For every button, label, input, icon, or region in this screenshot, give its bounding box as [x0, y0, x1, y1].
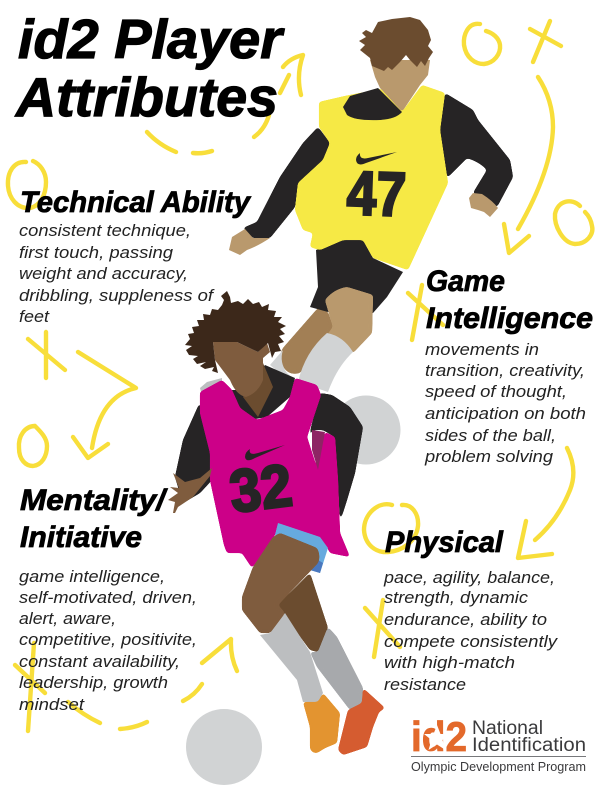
- face and neck: [370, 60, 430, 112]
- bib fold: [312, 430, 325, 470]
- player 47 in yellow bib: [229, 17, 513, 392]
- heading: [426, 265, 593, 335]
- title: id2 Player: [18, 8, 285, 70]
- hair: [359, 17, 433, 71]
- heading: Technical Ability: [20, 186, 251, 219]
- shorts: [275, 523, 328, 573]
- swoosh: [245, 445, 285, 460]
- title: Attributes: [14, 66, 278, 128]
- hair: [185, 291, 286, 373]
- description: self-motivated, driven,: [19, 588, 197, 607]
- title: [14, 8, 285, 128]
- logo mark: id2: [411, 713, 467, 760]
- front thigh: [325, 287, 373, 353]
- panel: mentality: [19, 484, 197, 714]
- collar: [343, 88, 402, 120]
- description: leadership, growth: [19, 673, 168, 692]
- circle: top right: [464, 24, 500, 64]
- description: anticipation on both: [425, 404, 586, 423]
- description: with high-match: [384, 653, 515, 672]
- logo: id2 national identification: [411, 713, 586, 774]
- sock back: [310, 627, 363, 710]
- heading: Intelligence: [426, 302, 593, 335]
- back leg: [278, 573, 328, 652]
- cross: game intelligence: [408, 285, 443, 340]
- panel: physical: [383, 526, 559, 694]
- player 32 in pink bib: [168, 291, 385, 755]
- description: transition, creativity,: [425, 361, 585, 380]
- panel: game intelligence: [424, 265, 593, 466]
- arrow: bottom dashed curve: [68, 639, 237, 729]
- shorts: [310, 240, 403, 313]
- description: speed of thought,: [425, 382, 567, 401]
- circle: above Technical Ability: [8, 161, 46, 208]
- right sleeve: [307, 393, 363, 522]
- right hand: [469, 193, 498, 217]
- cross: left: [28, 332, 65, 378]
- circle: right: [555, 201, 592, 244]
- arrow: top dashed curve: [147, 55, 303, 153]
- logo text: Identification: [472, 735, 586, 756]
- arrow: left: [73, 352, 136, 458]
- description: weight and accuracy,: [19, 264, 188, 283]
- description: dribbling, suppleness of: [19, 286, 215, 305]
- description: [424, 340, 586, 466]
- description: strength, dynamic: [384, 588, 529, 607]
- red boot: [338, 688, 385, 755]
- bib: [200, 378, 350, 568]
- description: resistance: [384, 675, 466, 694]
- neck: [243, 363, 273, 417]
- description: [19, 221, 215, 326]
- left sleeve: [175, 402, 212, 503]
- swoosh: [356, 152, 397, 164]
- description: problem solving: [424, 447, 554, 466]
- description: alert, aware,: [19, 609, 116, 628]
- shorts shade: [310, 560, 323, 573]
- heading: [20, 484, 168, 554]
- number 32: 32: [226, 451, 296, 525]
- description: pace, agility, balance,: [383, 568, 555, 587]
- description: constant availability,: [19, 652, 180, 671]
- circle: left: [19, 426, 47, 466]
- description: mindset: [19, 695, 85, 714]
- sock: [298, 333, 353, 392]
- description: compete consistently: [384, 632, 559, 651]
- hand: [168, 468, 212, 513]
- logo text: National: [472, 718, 543, 739]
- heading: Physical: [385, 526, 504, 559]
- right sleeve: [440, 93, 513, 207]
- number 47: 47: [346, 159, 407, 230]
- grey shoulder: [200, 378, 222, 392]
- back sock: [270, 350, 296, 381]
- face: [213, 342, 270, 397]
- cross: physical: [365, 600, 400, 657]
- description: feet: [19, 307, 50, 326]
- orange boot: [303, 693, 340, 753]
- cross: bottom left: [15, 643, 45, 731]
- description: [383, 568, 559, 694]
- description: sides of the ball,: [425, 426, 556, 445]
- collar: [232, 365, 295, 420]
- description: competitive, positivite,: [19, 630, 197, 649]
- description: [19, 567, 197, 714]
- sock front: [260, 613, 323, 702]
- left sleeve: [243, 127, 330, 238]
- left hand: [229, 229, 270, 255]
- logo text: [472, 718, 586, 756]
- description: endurance, ability to: [384, 610, 547, 629]
- description: first touch, passing: [19, 243, 174, 262]
- back leg: [280, 308, 333, 374]
- cross: top right: [530, 21, 561, 62]
- heading: Mentality/: [20, 484, 168, 517]
- ball: bottom: [186, 709, 262, 785]
- panel: technical ability: [19, 186, 251, 326]
- heading: Initiative: [20, 521, 142, 554]
- arrow: lower right: [518, 448, 573, 558]
- arrow: upper right: [504, 77, 553, 253]
- description: game intelligence,: [19, 567, 165, 586]
- logo tagline: Olympic Development Program: [411, 760, 586, 774]
- bib: [295, 85, 448, 270]
- ball: behind players: [332, 396, 400, 464]
- heading: Game: [426, 265, 505, 298]
- circle: physical: [364, 504, 418, 552]
- thigh: [242, 533, 319, 633]
- description: movements in: [425, 340, 539, 359]
- description: consistent technique,: [19, 221, 191, 240]
